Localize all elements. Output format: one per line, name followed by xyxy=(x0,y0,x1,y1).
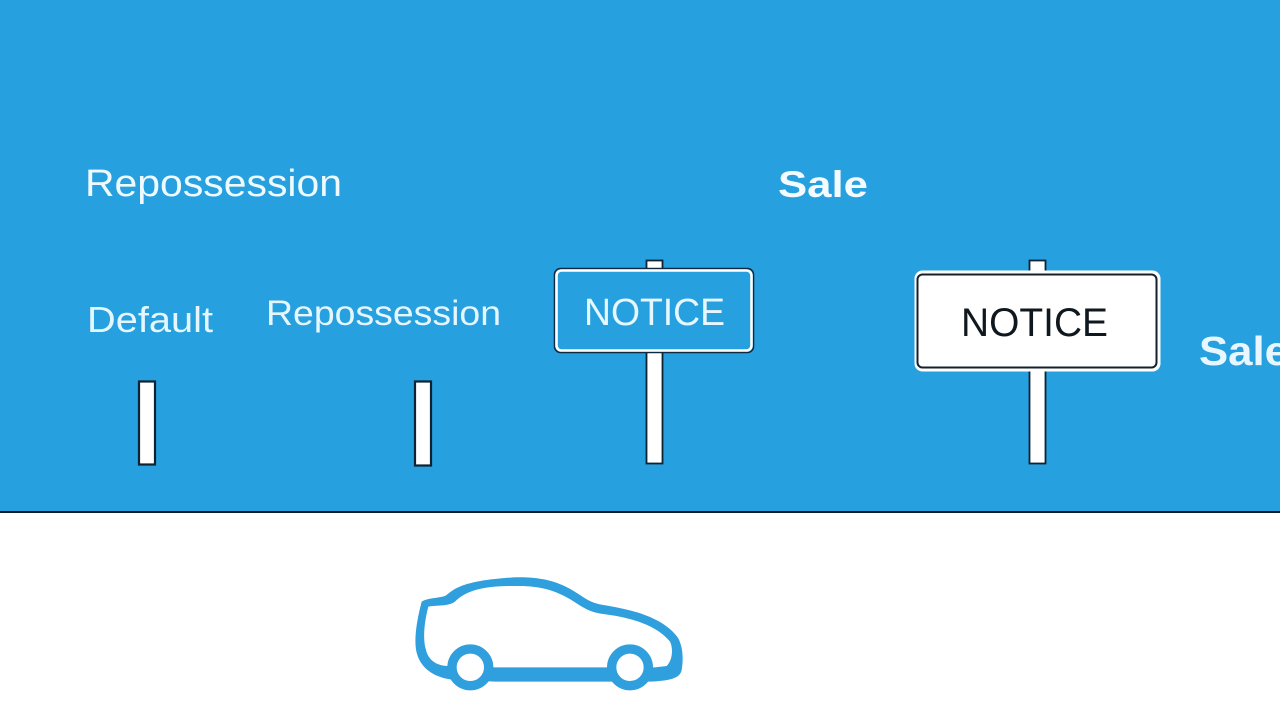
sign post xyxy=(1030,260,1046,464)
sign: blue notice xyxy=(554,260,754,464)
icon: car outline xyxy=(415,577,683,686)
post: Repossession xyxy=(415,382,431,466)
wheel: front xyxy=(612,649,648,686)
sign post xyxy=(646,260,662,464)
panel: blue background xyxy=(0,0,1280,512)
sign board xyxy=(554,268,754,352)
wheel: rear xyxy=(452,649,489,686)
sign board xyxy=(914,270,1160,372)
car body xyxy=(415,577,683,682)
sign text: NOTICE xyxy=(961,301,1108,345)
label: Repossession: Repossession xyxy=(266,294,501,333)
title: Repossession: Repossession xyxy=(85,163,342,205)
sign: white notice xyxy=(914,260,1160,464)
step: Default xyxy=(87,299,213,464)
heading: garbled label: Sale xyxy=(778,164,868,205)
post: Default xyxy=(139,382,155,464)
label: Default: Default xyxy=(87,299,213,340)
step: Repossession xyxy=(266,294,501,466)
sign text: NOTICE xyxy=(584,292,725,334)
